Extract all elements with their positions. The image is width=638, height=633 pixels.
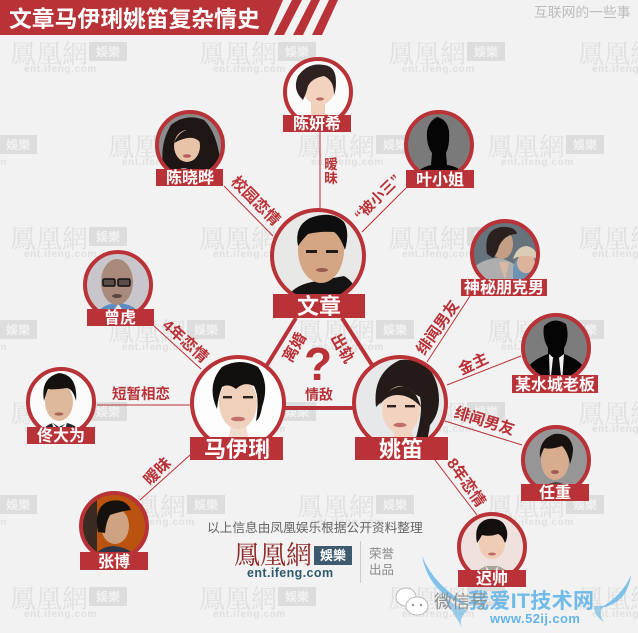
label: 暧昧 with 陈妍希: 昧 [324,171,338,186]
watermark grid: 鳳凰網 [487,487,565,524]
watermark grid: ent.ifeng.com [24,609,97,620]
watermark grid: ent.ifeng.com [122,157,195,168]
label: 离婚: 离婚 [278,329,310,365]
watermark grid: 鳳凰網 [388,219,466,256]
watermark grid: ent.ifeng.com [501,157,574,168]
watermark grid: 娛樂 [474,588,498,605]
watermark grid: 娛樂 [96,43,120,60]
person: 姚笛: 姚笛 [379,437,423,462]
person: 佟大为: 佟大为 [37,426,85,445]
ifeng logo credit: 出品 [369,563,394,577]
label: 短暂相恋: 短暂相恋 [112,385,170,403]
person: 陈晓晔: 陈晓晔 [166,168,214,187]
watermark grid: 娛樂 [6,321,30,338]
watermark grid: 鳳凰網 [10,34,88,71]
watermark grid: 娛樂 [194,321,218,338]
watermark grid: 娛樂 [285,588,309,605]
person: 曾虎: 曾虎 [104,308,136,327]
watermark grid: 娛樂 [6,496,30,513]
watermark grid: ent.ifeng.com [24,424,97,435]
person: 迟帅 [457,512,527,588]
ifeng logo credit [234,535,395,583]
watermark grid: 娛樂 [96,228,120,245]
watermark grid: ent.ifeng.com [311,157,384,168]
question mark: ? [304,338,332,390]
person: 某水城老板 [512,313,598,394]
watermark grid: ent.ifeng.com [311,517,384,528]
watermark grid: 娛樂 [285,403,309,420]
person: 马伊琍 [190,355,286,462]
person: 某水城老板: 某水城老板 [515,375,595,394]
person: 曾虎 [83,250,154,327]
WeChat account overlay [396,588,488,615]
watermark grid: ent.ifeng.com [311,342,384,353]
watermark grid: ent.ifeng.com [122,517,195,528]
watermark grid: 鳳凰網 [199,394,277,431]
watermark grid: ent.ifeng.com [213,64,286,75]
watermark grid: ent.ifeng.com [213,249,286,260]
label: 情敌: 情敌 [305,386,333,402]
person: 文章: 文章 [297,294,341,319]
watermark grid: 娛樂 [573,136,597,153]
watermark grid: 娛樂 [194,136,218,153]
label: 出轨: 出轨 [327,330,359,367]
watermark grid: 娛樂 [573,321,597,338]
person: 任重 [521,425,591,502]
watermark grid: ent.ifeng.com [122,342,195,353]
label: 4年恋情: 4年恋情 [159,315,213,366]
label: 绯闻男友 with 神秘朋克男: 绯闻男友 [413,297,463,358]
person: 任重: 任重 [539,484,571,502]
label: 校园恋情: 校园恋情 [227,172,285,229]
person: 迟帅: 迟帅 [476,570,508,588]
watermark grid: ent.ifeng.com [402,249,475,260]
watermark grid: 鳳凰網 [199,579,277,616]
person: 陈妍希 [283,57,353,133]
ifeng logo credit: 娛樂 [320,545,346,564]
watermark grid: 娛樂 [474,43,498,60]
person: 叶小姐 [404,110,474,189]
person: 叶小姐: 叶小姐 [416,171,464,189]
watermark grid: 鳳凰網 [297,487,375,524]
watermark grid: 鳳凰網 [487,127,565,164]
label: 暧昧 with 张博: 暧昧 [140,454,175,489]
person: 佟大为 [26,367,96,445]
site name top right: 互联网的一些事 [534,5,631,20]
watermark grid: 鳳凰網 [108,127,186,164]
person: 马伊琍: 马伊琍 [204,437,270,462]
watermark grid: ent.ifeng.com [213,424,286,435]
person: 姚笛 [352,355,448,462]
watermark grid: 娛樂 [383,136,407,153]
watermark grid: 娛樂 [96,403,120,420]
watermark grid: 鳳凰網 [487,312,565,349]
watermark grid: 鳳凰網 [388,394,466,431]
title banner [0,0,338,35]
person: 陈妍希: 陈妍希 [293,114,341,133]
WeChat account overlay: 微信号 [434,592,488,612]
person: 张博 [79,491,149,571]
watermark grid: 鳳凰網 [297,312,375,349]
watermark grid: 娛樂 [194,496,218,513]
watermark grid: ent.ifeng.com [24,249,97,260]
watermark grid: 鳳凰網 [10,579,88,616]
watermark grid: 鳳凰網 [10,394,88,431]
title text: 文章马伊琍姚笛复杂情史 [9,6,260,32]
watermark grid: 鳳凰網 [388,34,466,71]
label: 绯闻男友 with 任重: 绯闻男友 [452,404,517,439]
ifeng logo credit: 鳳凰網 [234,535,312,572]
label: 8年恋情: 8年恋情 [443,454,490,510]
watermark grid: 娛樂 [573,496,597,513]
watermark grid: 娛樂 [96,588,120,605]
watermark grid: ent.ifeng.com [402,424,475,435]
person: 张博: 张博 [98,552,130,571]
watermark grid: 娛樂 [474,403,498,420]
watermark grid: 鳳凰網 [388,579,466,616]
site logo overlay [422,556,631,628]
watermark grid: ent.ifeng.com [501,342,574,353]
watermark grid: 娛樂 [474,228,498,245]
watermark grid: 鳳凰網 [297,127,375,164]
watermark grid: 鳳凰網 [108,487,186,524]
watermark grid: 娛樂 [285,43,309,60]
relation labels [112,157,517,510]
source note: 以上信息由凤凰娱乐根据公开资料整理 [207,520,423,535]
person: 陈晓晔 [155,110,225,187]
ifeng logo credit: ent.ifeng.com [247,566,333,580]
watermark grid: ent.ifeng.com [213,609,286,620]
label: 金主: 金主 [455,348,491,379]
watermark grid: 娛樂 [383,496,407,513]
watermark grid: 鳳凰網 [108,312,186,349]
person: 文章 [270,208,366,319]
watermark grid: ent.ifeng.com [402,64,475,75]
relationship lines [97,132,522,515]
person: 神秘朋克男: 神秘朋克男 [464,278,544,297]
watermark grid: 娛樂 [383,321,407,338]
watermark grid: 鳳凰網 [199,34,277,71]
watermark grid: 娛樂 [285,228,309,245]
label: 暧昧 with 陈妍希: 暧 [324,157,338,172]
watermark grid: 鳳凰網 [10,219,88,256]
watermark grid: ent.ifeng.com [501,517,574,528]
watermark grid: 娛樂 [6,136,30,153]
site logo overlay: www.52ij.com [489,611,580,626]
watermark grid: 鳳凰網 [199,219,277,256]
watermark grid: ent.ifeng.com [402,609,475,620]
site logo overlay: 我爱IT技术网 [468,590,594,613]
person: 神秘朋克男 [461,219,547,297]
label: 被小三: “被小三” [351,171,404,224]
ifeng logo credit: 荣誉 [369,547,395,561]
watermark grid: ent.ifeng.com [24,64,97,75]
